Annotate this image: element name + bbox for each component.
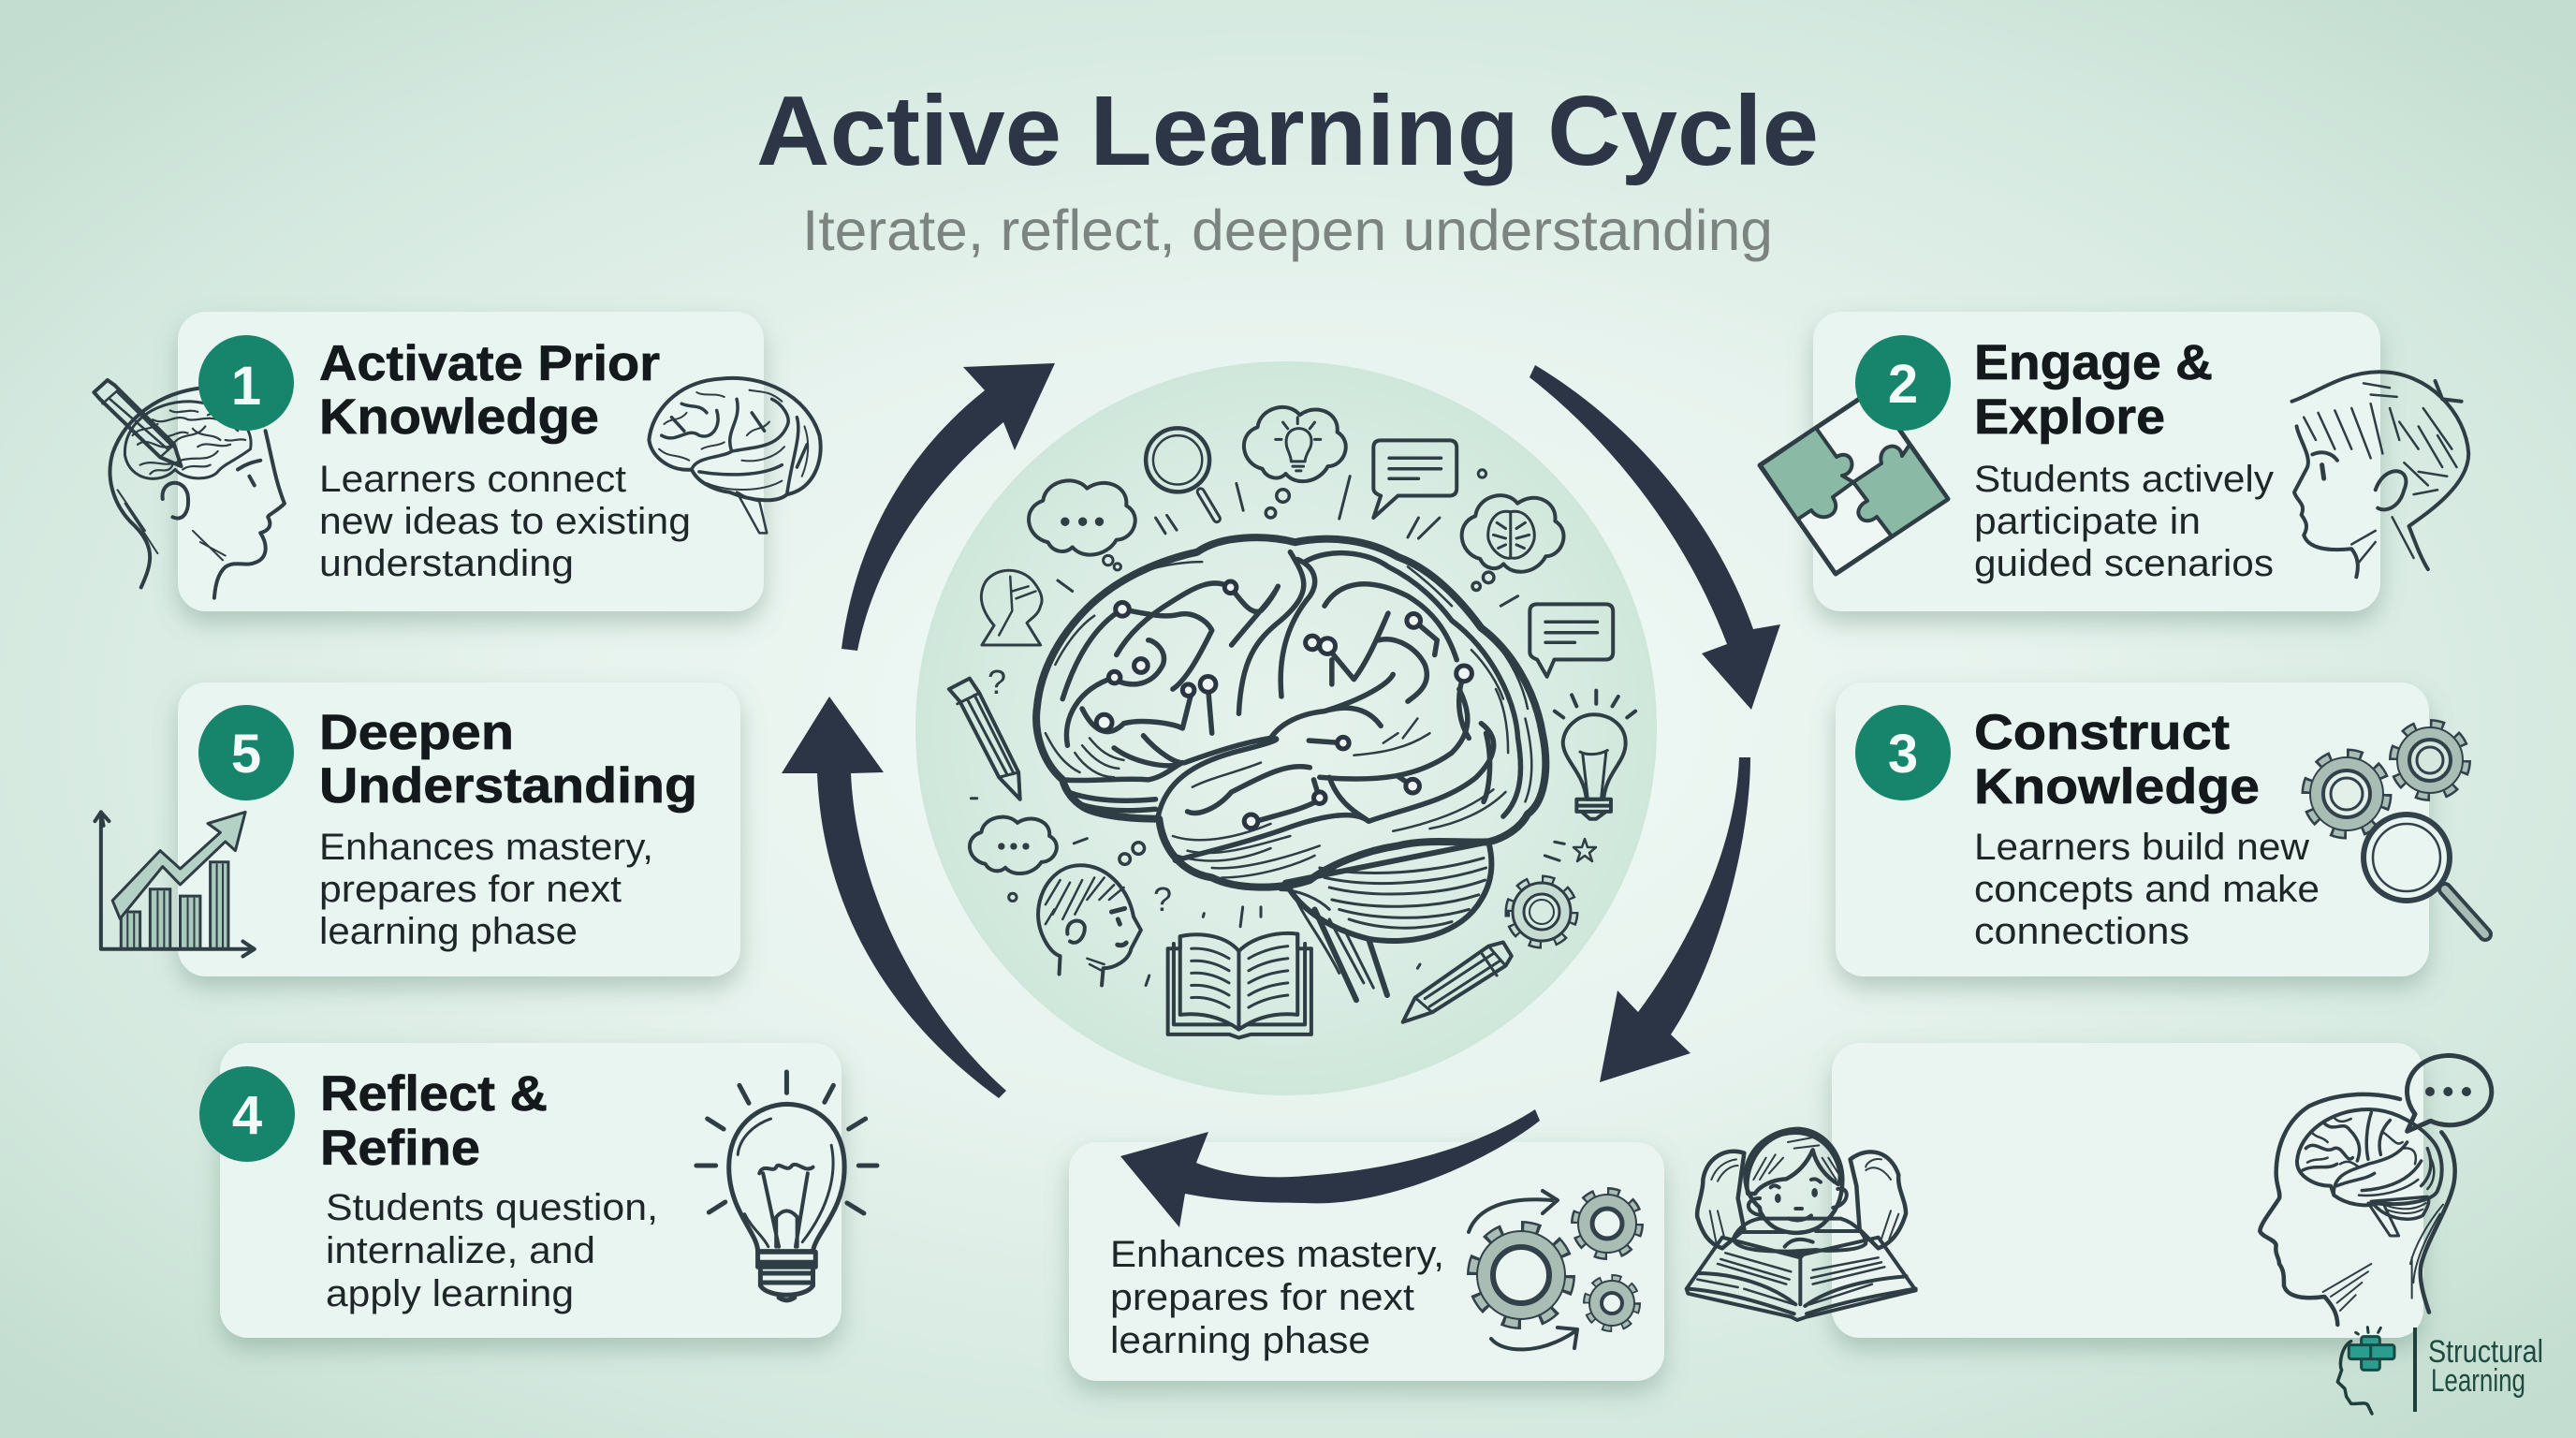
heading [319,336,660,445]
icon: magnifying glass [1146,428,1440,538]
body text: new ideas to existing [319,501,691,542]
arrow: step 3 to step 4 bottom [1120,1109,1540,1227]
icon: rising chart [95,812,255,957]
brain with connected nodes [1036,537,1545,1000]
heading: Explore [1974,389,2165,445]
logo wordmark: Structural [2428,1334,2543,1370]
question marks: ? [1153,880,1172,918]
icon: boy profile [2291,372,2468,577]
body text: Learners build new [1974,827,2309,868]
body text: learning phase [1110,1320,1370,1361]
heading [1974,705,2260,814]
badge 4 [199,1066,295,1162]
panel: step 5 deepen understanding [95,682,740,976]
icon: light bulb [1555,691,1635,819]
icon: head with brain and pencil [94,380,285,598]
panel: middle bottom card [1069,1142,1664,1381]
logo: Structural Learning [2337,1328,2543,1414]
card [1832,1043,2423,1338]
body text: Enhances mastery, [1110,1234,1444,1275]
icon: thought cloud with dots [1029,480,1135,570]
body text: internalize, and [326,1230,595,1271]
icon: small thought cloud [970,580,1564,873]
logo head and blocks [2337,1328,2394,1414]
body text [1974,459,2274,584]
body text: apply learning [326,1273,574,1314]
badge 4: 4 [232,1085,262,1146]
arrow: step 2 to step 3 [1530,365,1780,710]
heading: Construct [1974,705,2230,760]
icon: cycling gears [1469,1191,1638,1349]
icon: speech bubble [1373,440,1486,518]
icon: pencil lower right [1403,942,1512,1022]
body text: Enhances mastery, [319,827,653,868]
body text: participate in [1974,501,2201,542]
icon: brain [649,378,821,533]
panel: step 2 engage and explore [1760,312,2468,611]
logo wordmark: Learning [2431,1363,2525,1399]
badge 1 [198,335,294,431]
card [220,1043,842,1338]
icon: second speech bubble [1530,604,1613,677]
icon: thought cloud with light bulb [1244,407,1346,518]
panel: step 4 reflect and refine [199,1043,877,1338]
body text: concepts and make [1974,869,2320,910]
heading: Knowledge [1974,759,2260,814]
heading: Reflect & [320,1066,548,1122]
icon: gears and magnifier [2307,725,2485,934]
body text [1974,827,2320,952]
card [178,682,740,976]
panel: step 1 activate prior knowledge [94,312,821,611]
icon: head with brain and speech bubble [2260,1055,2492,1325]
arrow: step 4 to step 5 [782,697,1006,1098]
arrow: step 1 to step 2 start [842,363,1055,651]
question marks: ? [988,663,1006,701]
body text: Learners connect [319,459,626,500]
icon: head with brain sketch [981,570,1042,645]
badge 1: 1 [231,356,261,417]
heading [1974,335,2213,445]
icon: thought cloud with brain [1462,495,1563,590]
icon: pencil left [949,679,1020,800]
badge 5: 5 [231,724,261,785]
body text: connections [1974,911,2189,952]
heading [319,705,697,814]
question marks [988,663,1172,918]
central disc [915,361,1657,1095]
icon: child reading book [1687,1129,1916,1320]
body text [326,1187,658,1314]
heading: Understanding [319,758,697,814]
body text [319,459,691,584]
card [1813,312,2380,611]
badge 3: 3 [1888,724,1918,785]
body text: prepares for next [319,869,622,910]
icon: star [1573,839,1596,861]
panel: step 3 construct knowledge [1836,682,2485,976]
logo divider [2413,1328,2417,1412]
badge 2: 2 [1888,354,1918,415]
title: Active Learning Cycle [756,76,1819,186]
icon: gear [1510,880,1573,944]
body text [319,827,653,952]
heading: Engage & [1974,335,2213,390]
heading: Knowledge [319,389,599,445]
icon: open book [1146,907,1420,1037]
badge 5 [198,705,294,800]
heading [320,1066,548,1176]
panel: blank right bottom card [1687,1043,2492,1338]
body text: prepares for next [1110,1277,1414,1318]
body text: understanding [319,543,574,584]
badge 2 [1855,335,1951,431]
heading: Refine [320,1121,480,1176]
icon: puzzle [1760,390,1948,574]
subtitle: Iterate, reflect, deepen understanding [802,198,1773,262]
panel: central brain illustration [915,361,1657,1095]
body text [1110,1234,1444,1361]
body text: Students actively [1974,459,2274,500]
icon: child head [1009,843,1145,986]
card [178,312,764,611]
badge 3 [1855,705,1951,800]
heading: Activate Prior [319,336,660,391]
body text: guided scenarios [1974,543,2274,584]
arrow: step 3 down [1600,757,1750,1082]
body text: learning phase [319,911,578,952]
card [1069,1142,1664,1381]
icon: light bulb [696,1072,877,1300]
card [1836,682,2429,976]
heading: Deepen [319,705,514,760]
body text: Students question, [326,1187,658,1228]
logo wordmark [2428,1334,2543,1399]
